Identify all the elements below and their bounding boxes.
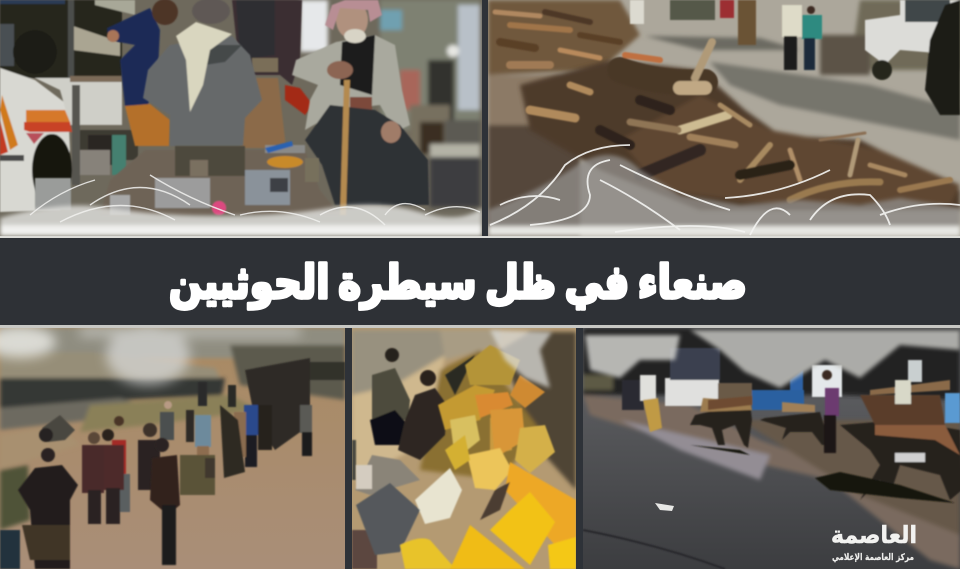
smoke overlay — [585, 330, 960, 388]
foreground men — [0, 438, 180, 569]
men in camouflage — [352, 348, 475, 480]
litter on road — [655, 503, 674, 511]
smoke wisps — [30, 175, 480, 225]
panel: firewood pile photo — [488, 0, 960, 236]
smoke wisps — [490, 145, 960, 235]
road and shadows — [488, 0, 960, 236]
person: dark standing man — [232, 0, 313, 148]
background buildings — [300, 0, 480, 207]
jerry cans — [356, 345, 576, 569]
smoke cloud — [488, 155, 960, 236]
logo tagline: مركز العاصمة الإعلامي — [832, 553, 914, 563]
logo — [832, 524, 916, 562]
panel: street vendor with old man photo — [0, 0, 482, 236]
firewood logs — [495, 12, 950, 200]
smoke overlay — [0, 325, 300, 385]
truck — [0, 0, 138, 212]
panel: fuel queue photo — [0, 325, 345, 569]
motorcycle — [39, 415, 75, 442]
logo name: العاصمة — [831, 521, 917, 549]
road edge line — [583, 530, 725, 569]
storefronts — [622, 348, 922, 410]
background people and truck — [630, 0, 960, 115]
smoke overlay — [490, 330, 552, 388]
bottom band edge — [0, 325, 960, 328]
panel: jerry cans photo — [352, 328, 576, 569]
vendor goods table — [35, 141, 340, 215]
title bar top edge — [0, 236, 960, 238]
people and donkeys — [640, 370, 960, 503]
person: old man with cane — [292, 0, 429, 215]
person: man in grey jacket with scarf — [143, 0, 262, 146]
smoke band — [0, 205, 482, 236]
firewood piles — [520, 60, 960, 210]
wall and ground — [352, 330, 576, 490]
hillside and building — [0, 328, 345, 530]
queue of people — [82, 358, 345, 524]
title bar — [0, 238, 960, 325]
roadside ground — [583, 328, 960, 569]
person: navy jacket man — [107, 0, 178, 146]
panel: donkeys carrying firewood photo — [583, 328, 960, 569]
seated man and bags — [352, 455, 420, 569]
title: صنعاء في ظل سيطرة الحوثيين — [169, 246, 747, 312]
